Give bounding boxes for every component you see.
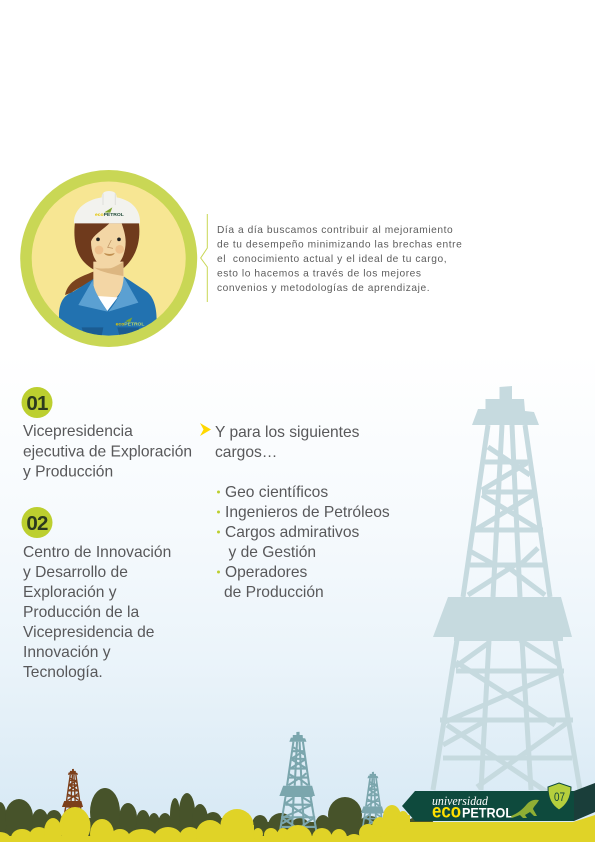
bullet markers — [217, 490, 220, 574]
intro paragraph: Día a día buscamos contribuir al mejoramiento — [217, 225, 453, 236]
text block: item 02: Tecnología. — [23, 664, 103, 681]
yellow foreground bushes — [0, 805, 595, 842]
icon: pockets — [82, 327, 139, 336]
jacket logo — [116, 318, 144, 326]
logo wordmark: eco — [432, 802, 461, 822]
page number shield — [548, 783, 571, 810]
callout divider with notch — [201, 214, 207, 302]
number badge 01: 01 — [26, 392, 48, 415]
logo wordmark: PETROL — [462, 804, 513, 820]
text block: item 02: Centro de Innovación — [23, 544, 171, 561]
job list: Operadores — [225, 564, 308, 581]
text block: intro to job list — [215, 424, 360, 461]
footer banner — [402, 783, 595, 822]
logo wordmark — [432, 794, 513, 822]
text block: intro to job list: Y para los siguientes — [215, 424, 360, 441]
jacket logo: ecoPETROL — [116, 321, 144, 327]
page number shield: 07 — [554, 792, 565, 804]
portrait: woman engineer in hard hat — [20, 170, 197, 347]
large background oil derrick — [433, 386, 580, 792]
job list: Ingenieros de Petróleos — [225, 504, 390, 521]
icon: jacket — [59, 277, 157, 337]
text block: item 02: y Desarrollo de — [23, 564, 128, 581]
job list — [217, 484, 390, 601]
number badge 02: 02 — [26, 512, 48, 535]
icon: hard hat ridge — [103, 193, 115, 205]
intro paragraph: de tu desempeño minimizando las brechas entre — [217, 240, 462, 250]
job list: Geo científicos — [225, 484, 328, 501]
text block: item 02: Vicepresidencia de — [23, 624, 154, 641]
intro paragraph — [217, 225, 462, 294]
helmet logo — [95, 208, 124, 216]
number badge 02 — [22, 507, 52, 538]
brown small derrick — [62, 769, 84, 831]
icon: neck — [93, 262, 124, 298]
job list: Cargos admirativos — [225, 524, 360, 541]
job list: de Producción — [224, 584, 324, 601]
text block: intro to job list: cargos… — [215, 444, 277, 461]
icon: cheeks — [95, 245, 124, 254]
icon: iguana — [511, 800, 539, 818]
text block: item 02: Innovación y — [23, 644, 111, 661]
icon: nose — [108, 240, 113, 248]
banner flap — [574, 783, 595, 821]
icon: ponytail — [65, 272, 96, 295]
teal small derrick — [361, 772, 385, 838]
logo wordmark: universidad — [432, 794, 489, 808]
job list: y de Gestión — [228, 544, 316, 561]
icon: mouth — [104, 253, 115, 256]
text block: item 02: Producción de la — [23, 604, 139, 621]
number badge 01 — [22, 387, 52, 418]
icon: hard hat — [74, 191, 140, 223]
icon: neck shadow — [94, 262, 123, 276]
teal medium derrick — [279, 732, 317, 836]
intro paragraph: convenios y metodologías de aprendizaje. — [217, 283, 430, 294]
text block: item 01: Vicepresidencia — [23, 423, 133, 440]
banner body — [402, 791, 574, 821]
helmet logo: ecoPETROL — [95, 212, 124, 218]
dark green bushes — [0, 788, 434, 842]
icon: eyes — [96, 237, 121, 241]
intro paragraph: el conocimiento actual y el ideal de tu cargo, — [217, 254, 447, 265]
text block: item 02: Exploración y — [23, 584, 117, 601]
text block: item 02 — [23, 544, 171, 681]
icon: hair — [74, 222, 139, 269]
icon: face — [91, 223, 126, 268]
text block: item 01: ejecutiva de Exploración — [23, 444, 192, 460]
intro paragraph: esto lo hacemos a través de los mejores — [217, 268, 422, 280]
text block: item 01 — [23, 423, 192, 480]
icon: collar — [78, 277, 138, 312]
text block: item 01: y Producción — [23, 464, 113, 480]
icon: white shirt — [97, 296, 118, 311]
arrow: yellow chevron — [200, 423, 211, 436]
